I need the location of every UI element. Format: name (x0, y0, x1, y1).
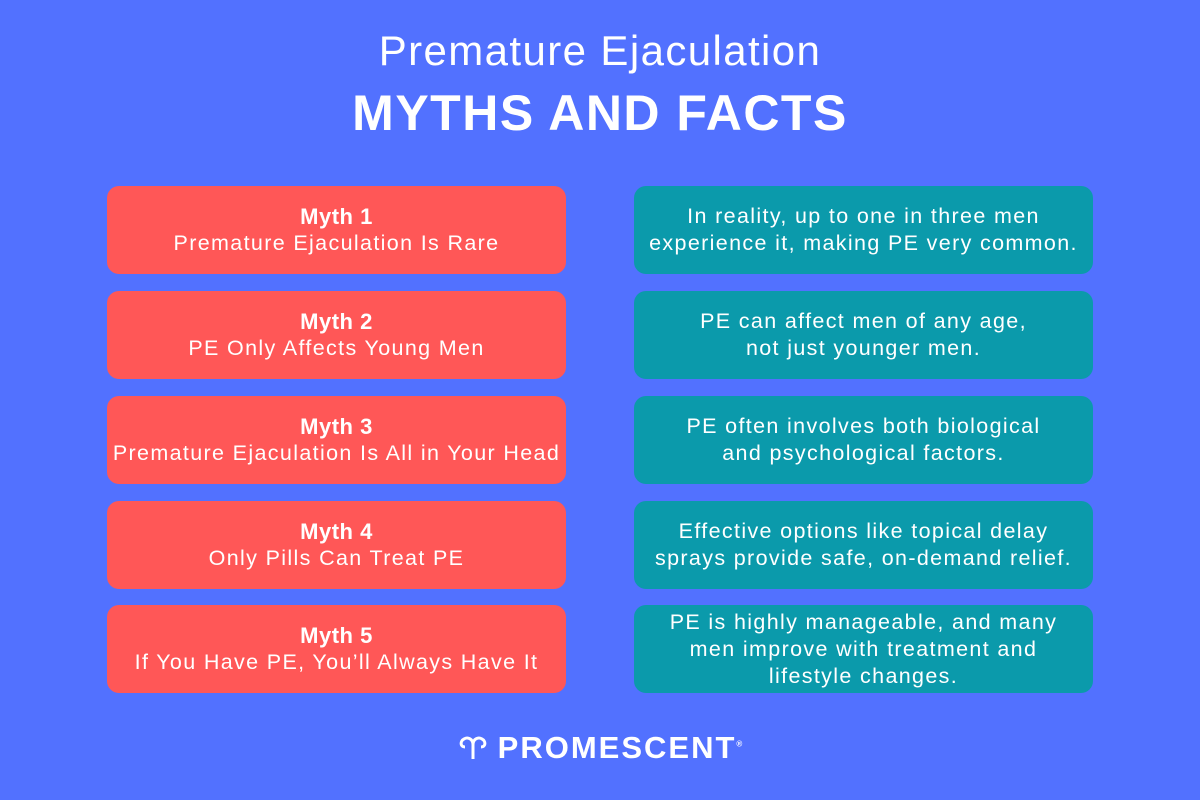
myth 4: Myth 4 (300, 519, 373, 544)
title line 1: Premature Ejaculation (379, 27, 821, 74)
fact 4: Effective options like topical delay (679, 519, 1048, 543)
fact 5 (634, 605, 1093, 693)
fact 3: PE often involves both biological (686, 414, 1041, 438)
fact 1 (634, 186, 1093, 274)
myth 5 (107, 605, 566, 693)
myth 5: If You Have PE, You’ll Always Have It (135, 650, 538, 674)
fact 2 (634, 291, 1093, 379)
fact 1: In reality, up to one in three men (687, 204, 1040, 228)
myth 2 (107, 291, 566, 379)
myth 3 (107, 396, 566, 484)
myth 5: Myth 5 (300, 623, 373, 648)
fact 1: experience it, making PE very common. (649, 231, 1078, 255)
myth 3: Myth 3 (300, 414, 373, 439)
logo: PROMESCENT® (498, 730, 744, 765)
fact 4: sprays provide safe, on-demand relief. (655, 546, 1072, 570)
fact 3: and psychological factors. (722, 441, 1005, 465)
myth 1: Myth 1 (300, 204, 373, 229)
myth 1 (107, 186, 566, 274)
myth 4: Only Pills Can Treat PE (209, 546, 464, 570)
fact 5: lifestyle changes. (769, 664, 958, 688)
fact 3 (634, 396, 1093, 484)
myth 3: Premature Ejaculation Is All in Your Head (113, 441, 560, 465)
fact 5: men improve with treatment and (690, 636, 1037, 660)
title line 2: MYTHS AND FACTS (352, 85, 848, 141)
myth 2: Myth 2 (300, 309, 373, 334)
fact 2: PE can affect men of any age, (700, 309, 1027, 333)
myth 2: PE Only Affects Young Men (188, 336, 485, 360)
fact 4 (634, 501, 1093, 589)
myth 1: Premature Ejaculation Is Rare (174, 231, 499, 255)
fact 2: not just younger men. (746, 336, 981, 360)
myth 4 (107, 501, 566, 589)
fact 5: PE is highly manageable, and many (670, 610, 1057, 634)
